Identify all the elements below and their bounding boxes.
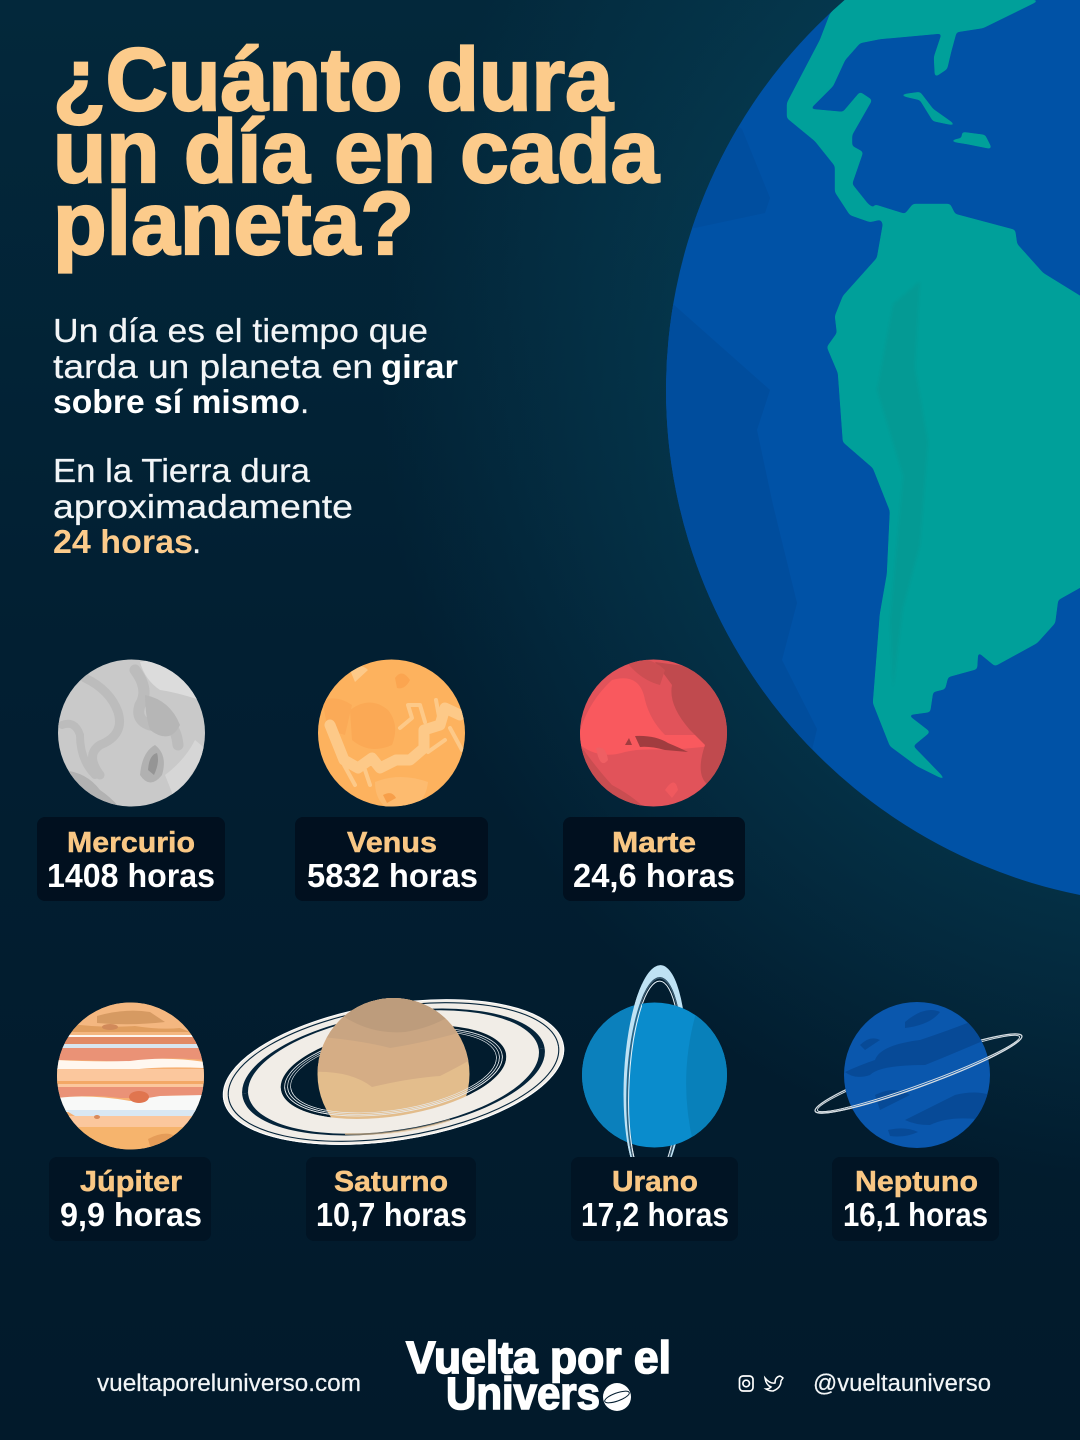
label: Uranus: Urano <box>612 1166 698 1198</box>
label: Uranus <box>571 1157 738 1241</box>
planet: Venus <box>318 660 465 812</box>
icon: twitter <box>765 1376 783 1391</box>
text block: Earth day: 24 horas <box>53 523 193 560</box>
dark ocean shading upper <box>692 126 738 228</box>
South America <box>827 204 1080 781</box>
label: Jupiter: Júpiter <box>80 1166 182 1198</box>
text block: definition: tarda un planeta en <box>53 348 373 385</box>
Cuba <box>903 92 953 125</box>
label: Jupiter <box>49 1157 211 1241</box>
text block: Earth day: En la Tierra dura <box>53 452 311 489</box>
planet: Jupiter <box>57 1000 205 1152</box>
label: Venus: Venus <box>347 827 437 859</box>
text block: Earth day <box>53 452 353 560</box>
label: Neptune <box>832 1157 999 1241</box>
label: Mars: Marte <box>612 827 696 859</box>
icon: logo planet o <box>603 1383 631 1411</box>
icon: instagram <box>740 1376 753 1391</box>
label: Mercury: 1408 horas <box>47 857 215 894</box>
label: Venus <box>295 817 488 901</box>
label: Neptune: Neptuno <box>855 1166 978 1198</box>
label: Mars: 24,6 horas <box>573 857 735 894</box>
Florida <box>934 30 957 77</box>
North and Central America <box>787 0 1040 222</box>
footer: logo: Univers <box>446 1368 600 1419</box>
label: Mars <box>563 817 745 901</box>
footer: website: vueltaporeluniverso.com <box>97 1370 361 1397</box>
dark ocean shading lower <box>666 304 817 748</box>
text block: definition: . <box>300 383 309 420</box>
title <box>53 29 660 273</box>
text block: definition: girar <box>381 348 458 385</box>
title: un día en cada <box>53 101 660 201</box>
planet: Saturn <box>222 998 564 1145</box>
label: Venus: 5832 horas <box>307 857 478 894</box>
text block: Earth day: . <box>192 523 201 560</box>
label: Jupiter: 9,9 horas <box>60 1196 202 1233</box>
planet: Mars <box>580 659 730 815</box>
title: planeta? <box>53 173 414 273</box>
footer: logo: Vuelta por el <box>406 1332 671 1383</box>
Hispaniola <box>953 132 991 148</box>
label: Mercury: Mercurio <box>67 827 195 859</box>
title: ¿Cuánto dura <box>53 29 614 129</box>
footer: logo <box>406 1332 671 1419</box>
text block: definition <box>53 312 458 420</box>
label: Uranus: 17,2 horas <box>581 1196 729 1233</box>
planet: Neptune <box>811 1002 1026 1148</box>
Andes shading <box>877 281 928 689</box>
land masses <box>787 0 1080 781</box>
label: Saturn: Saturno <box>334 1166 448 1198</box>
planet: Uranus <box>582 965 727 1157</box>
text block: definition: Un día es el tiempo que <box>53 312 428 349</box>
text block: Earth day: aproximadamente <box>53 488 353 525</box>
icon: planet Earth <box>640 0 1080 905</box>
footer: handle: @vueltauniverso <box>813 1370 991 1397</box>
label: Neptune: 16,1 horas <box>843 1196 988 1233</box>
label: Saturn <box>306 1157 476 1241</box>
label: Saturn: 10,7 horas <box>316 1196 467 1233</box>
planet: Mercury <box>55 660 207 815</box>
text block: definition: sobre sí mismo <box>53 383 300 420</box>
label: Mercury <box>37 817 225 901</box>
